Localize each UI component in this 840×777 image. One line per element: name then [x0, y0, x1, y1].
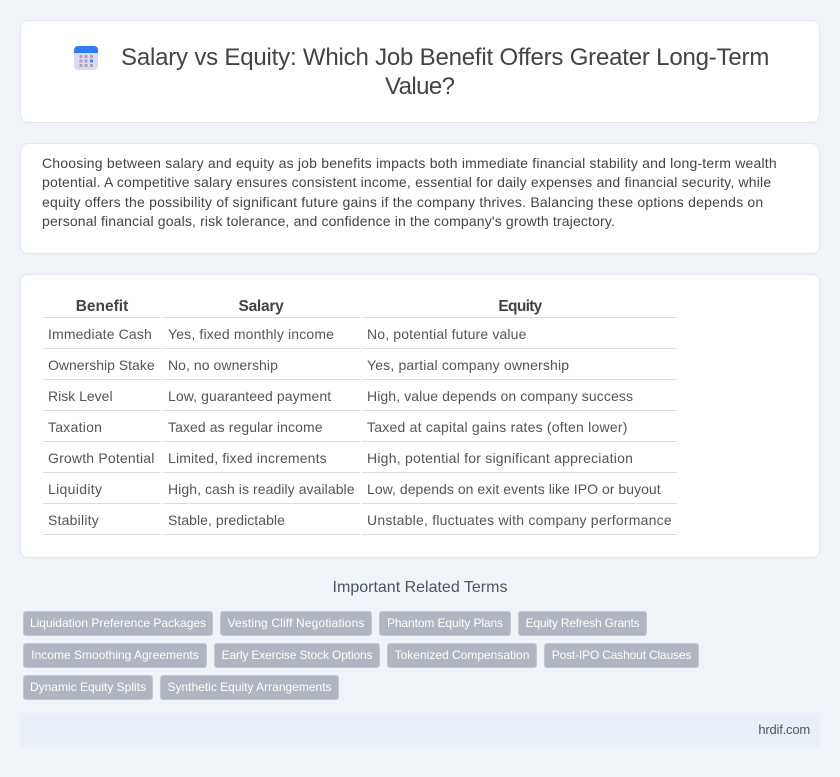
intro text: equity offers the possibility of significant future gains if the company thrives. Balancing these options depends on — [42, 194, 763, 210]
title — [121, 44, 769, 100]
panel: introduction — [20, 143, 820, 254]
footer source: hrdif.com — [758, 722, 810, 737]
row: liquidity — [43, 481, 677, 504]
related term tags: Vesting Cliff Negotiations — [227, 616, 365, 630]
row: ownership stake: No, no ownership — [168, 357, 278, 373]
panel: header — [20, 20, 820, 123]
related term tags: Synthetic Equity Arrangements — [167, 680, 332, 694]
row: taxation: Taxed at capital gains rates (often lower) — [367, 419, 628, 435]
row: risk level — [43, 388, 677, 411]
related term tags: Liquidation Preference Packages — [30, 616, 206, 630]
heading: important related terms: Important Related Terms — [333, 579, 507, 596]
related term tags: Phantom Equity Plans — [387, 616, 503, 630]
row: risk level: High, value depends on company success — [367, 388, 633, 404]
row: taxation — [43, 419, 677, 442]
table — [43, 298, 677, 535]
row: stability: Unstable, fluctuates with company performance — [367, 512, 672, 528]
row: growth potential: Growth Potential — [48, 450, 155, 466]
row: immediate cash: Yes, fixed monthly income — [168, 326, 334, 342]
icon: calendar — [74, 46, 98, 70]
intro text: personal financial goals, risk tolerance, and confidence in the company's growth trajectory. — [42, 213, 615, 229]
row: growth potential: High, potential for significant appreciation — [367, 450, 633, 466]
row: risk level: Risk Level — [48, 388, 113, 404]
table header — [43, 298, 677, 318]
row: immediate cash: No, potential future value — [367, 326, 527, 342]
intro text: potential. A competitive salary ensures consistent income, essential for daily expenses and financial security, while — [42, 174, 771, 190]
title: Value? — [385, 73, 454, 100]
related term tags: Post-IPO Cashout Clauses — [552, 648, 691, 662]
intro text: Choosing between salary and equity as job benefits impacts both immediate financial stability and long-term wealth — [42, 155, 777, 171]
panel: comparison table — [20, 274, 820, 558]
row: liquidity: Low, depends on exit events like IPO or buyout — [367, 481, 661, 497]
row: taxation: Taxed as regular income — [168, 419, 323, 435]
row: ownership stake: Ownership Stake — [48, 357, 155, 373]
table header: Benefit — [76, 298, 128, 315]
row: stability: Stable, predictable — [168, 512, 285, 528]
intro text — [42, 155, 777, 229]
row: ownership stake: Yes, partial company ownership — [367, 357, 569, 373]
table header: Salary — [238, 298, 284, 315]
related term tags: Income Smoothing Agreements — [31, 648, 199, 662]
footer bar — [20, 713, 820, 747]
row: immediate cash — [43, 326, 677, 349]
related term tags: Dynamic Equity Splits — [30, 680, 146, 694]
table header: Equity — [498, 298, 542, 315]
row: liquidity: Liquidity — [48, 481, 102, 497]
row: risk level: Low, guaranteed payment — [168, 388, 331, 404]
related term tags: Tokenized Compensation — [395, 648, 529, 662]
related term tags: Early Exercise Stock Options — [222, 648, 372, 662]
row: growth potential — [43, 450, 677, 473]
row: stability: Stability — [48, 512, 99, 528]
row: immediate cash: Immediate Cash — [48, 326, 152, 342]
related term tags — [23, 611, 699, 700]
row: stability — [43, 512, 677, 535]
row: taxation: Taxation — [48, 419, 102, 435]
related term tags: Equity Refresh Grants — [526, 616, 639, 630]
row: ownership stake — [43, 357, 677, 380]
row: liquidity: High, cash is readily available — [168, 481, 355, 497]
row: growth potential: Limited, fixed increments — [168, 450, 327, 466]
title: Salary vs Equity: Which Job Benefit Offers Greater Long-Term — [121, 44, 769, 71]
